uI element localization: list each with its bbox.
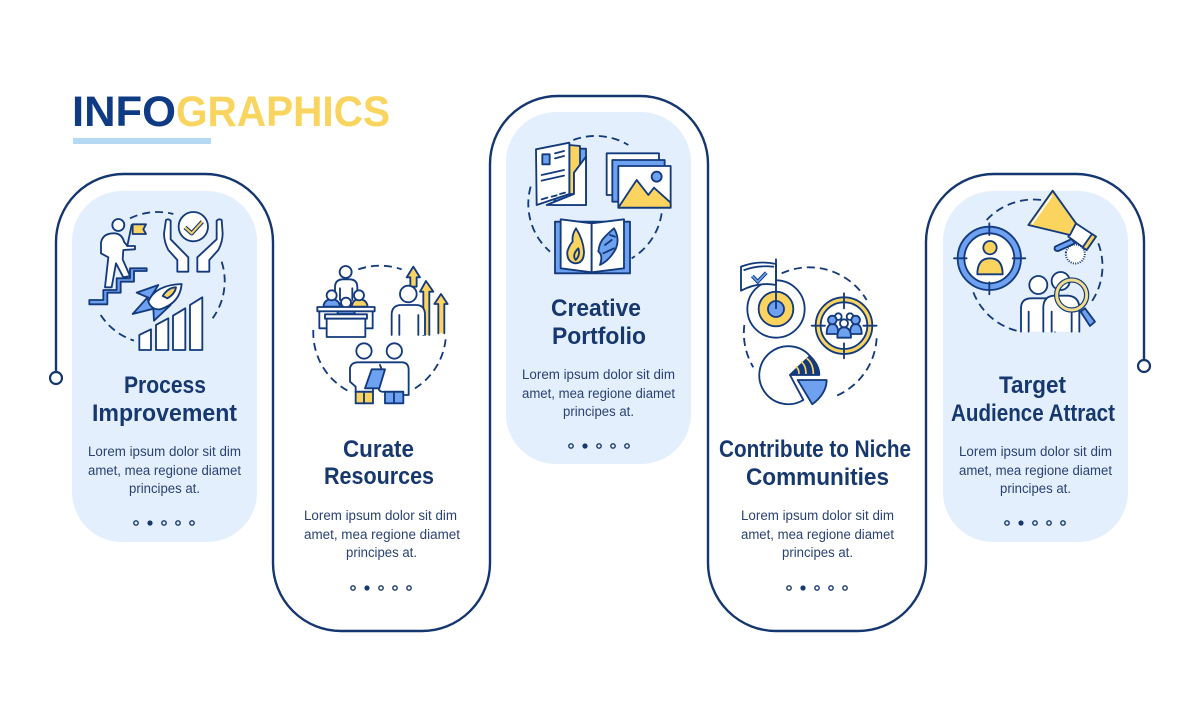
title: INFO: [72, 88, 176, 136]
icon: curate resources: [313, 266, 448, 403]
art book: [555, 222, 630, 273]
pagination dots: [569, 443, 629, 449]
body text: amet, mea regione diamet: [522, 386, 675, 401]
panel: target audience: [943, 191, 1128, 542]
icon: target audience: [954, 191, 1102, 332]
body text: principes at.: [563, 404, 634, 419]
body text: [304, 508, 460, 560]
outline end node: [1138, 360, 1150, 372]
heading: Target: [999, 372, 1066, 399]
body text: [959, 444, 1112, 496]
body text: Lorem ipsum dolor sit dim: [959, 444, 1112, 459]
outline start node: [50, 372, 62, 384]
body text: principes at.: [129, 481, 200, 496]
heading: Audience Attract: [951, 400, 1115, 427]
heading: Portfolio: [552, 323, 646, 350]
pagination dots: [1005, 520, 1065, 526]
pagination dots: [787, 585, 847, 591]
body text: amet, mea regione diamet: [304, 527, 460, 542]
title underline: [73, 138, 211, 144]
panel: process improvement: [72, 191, 257, 542]
body text: Lorem ipsum dolor sit dim: [304, 508, 457, 523]
body text: principes at.: [1000, 481, 1071, 496]
icon: process improvement: [89, 212, 225, 350]
icon: niche communities: [741, 259, 877, 404]
pagination dots: [134, 520, 194, 526]
body text: [522, 367, 675, 419]
target person: [958, 227, 1021, 290]
audience crosshair: [816, 297, 872, 354]
heading: Resources: [324, 463, 434, 490]
body text: [741, 508, 894, 560]
heading: Curate: [343, 436, 414, 463]
person: [392, 305, 425, 335]
folder and document: [553, 149, 586, 205]
title: [72, 88, 390, 136]
heading: [951, 372, 1115, 427]
people: [1021, 298, 1055, 332]
icon: creative portfolio: [528, 136, 671, 273]
growth bars: [139, 329, 151, 350]
heading: Communities: [746, 464, 889, 491]
heading: Improvement: [92, 400, 237, 427]
heading: [92, 372, 237, 427]
heading: Creative: [551, 295, 641, 322]
body text: amet, mea regione diamet: [959, 463, 1112, 478]
pagination dots: [351, 585, 411, 591]
title: GRAPHICS: [176, 88, 390, 136]
heading: [324, 436, 434, 490]
two colleagues: [356, 392, 373, 403]
heading: [719, 436, 911, 491]
megaphone: [1066, 245, 1085, 263]
arrows: [407, 267, 420, 287]
hands: [164, 219, 188, 272]
body text: Lorem ipsum dolor sit dim: [741, 508, 894, 523]
target and flag: [747, 280, 805, 338]
panel: curate resources: [304, 266, 460, 591]
panel: creative portfolio: [506, 112, 691, 464]
connecting outline: [56, 96, 1144, 631]
body text: amet, mea regione diamet: [741, 527, 894, 542]
body text: Lorem ipsum dolor sit dim: [88, 444, 241, 459]
heading: Process: [124, 372, 206, 399]
heading: Contribute to Niche: [719, 436, 911, 463]
body text: principes at.: [782, 545, 853, 560]
image stack: [607, 153, 659, 195]
stairs: [89, 268, 147, 304]
body text: principes at.: [346, 545, 417, 560]
magnifier: [1081, 308, 1095, 326]
panel: niche communities: [719, 259, 911, 591]
body text: amet, mea regione diamet: [88, 463, 241, 478]
body text: Lorem ipsum dolor sit dim: [522, 367, 675, 382]
teacher and students: [335, 279, 357, 303]
pie chart: [759, 346, 810, 404]
heading: [551, 295, 646, 350]
rocket: [137, 285, 158, 298]
body text: [88, 444, 241, 496]
